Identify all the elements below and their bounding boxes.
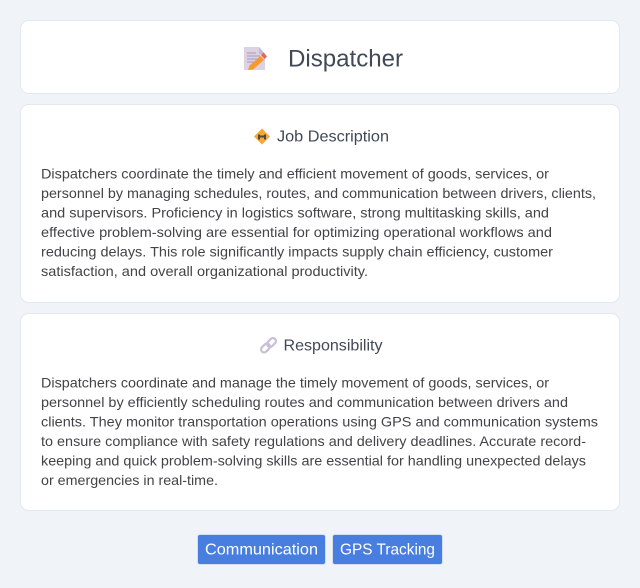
icon: orange diamond sign	[254, 128, 270, 144]
text block: job description: reducing delays. This role significantly impacts supply chain efficiency, customer	[41, 244, 553, 260]
text block: responsibility: personnel by efficiently scheduling routes and communication between drivers and	[41, 394, 568, 410]
heading: job description: Job Description	[277, 128, 389, 146]
icon: chain link	[260, 337, 277, 354]
tag: communication	[198, 534, 326, 564]
text block: responsibility	[41, 374, 598, 488]
title: Dispatcher	[288, 46, 403, 72]
panel: job description	[20, 104, 620, 302]
text block: job description: satisfaction, and overall organizational productivity.	[41, 263, 368, 279]
text block: job description	[41, 166, 596, 279]
icon: document with pencil	[244, 47, 267, 70]
text block: job description: personnel by managing schedules, routes, and communication between drivers, clients,	[41, 185, 596, 201]
tag: communication: Communication	[205, 542, 318, 558]
panel: responsibility	[20, 314, 620, 510]
heading: responsibility: Responsibility	[284, 338, 382, 354]
text block: responsibility: keeping and quick problem-solving skills are essential for handling unexpected delays	[41, 452, 586, 468]
text block: responsibility: clients. They monitor transportation operations using GPS and communication systems	[41, 414, 598, 430]
tag: gps tracking	[332, 534, 442, 564]
text block: responsibility: Dispatchers coordinate and manage the timely movement of goods, services, or	[41, 374, 549, 390]
text block: job description: and supervisors. Proficiency in logistics software, strong multitasking skills, and	[41, 204, 549, 220]
text block: job description: effective problem-solving are essential for optimizing operational workflows and	[41, 224, 552, 240]
text block: job description: Dispatchers coordinate the timely and efficient movement of goods, services, or	[41, 166, 549, 182]
text block: responsibility: to ensure compliance with safety regulations and delivery deadlines. Accurate record-	[41, 433, 586, 449]
text block: responsibility: or emergencies in real-time.	[41, 472, 218, 488]
panel: title card	[20, 20, 620, 94]
tag: gps tracking: GPS Tracking	[340, 542, 435, 558]
